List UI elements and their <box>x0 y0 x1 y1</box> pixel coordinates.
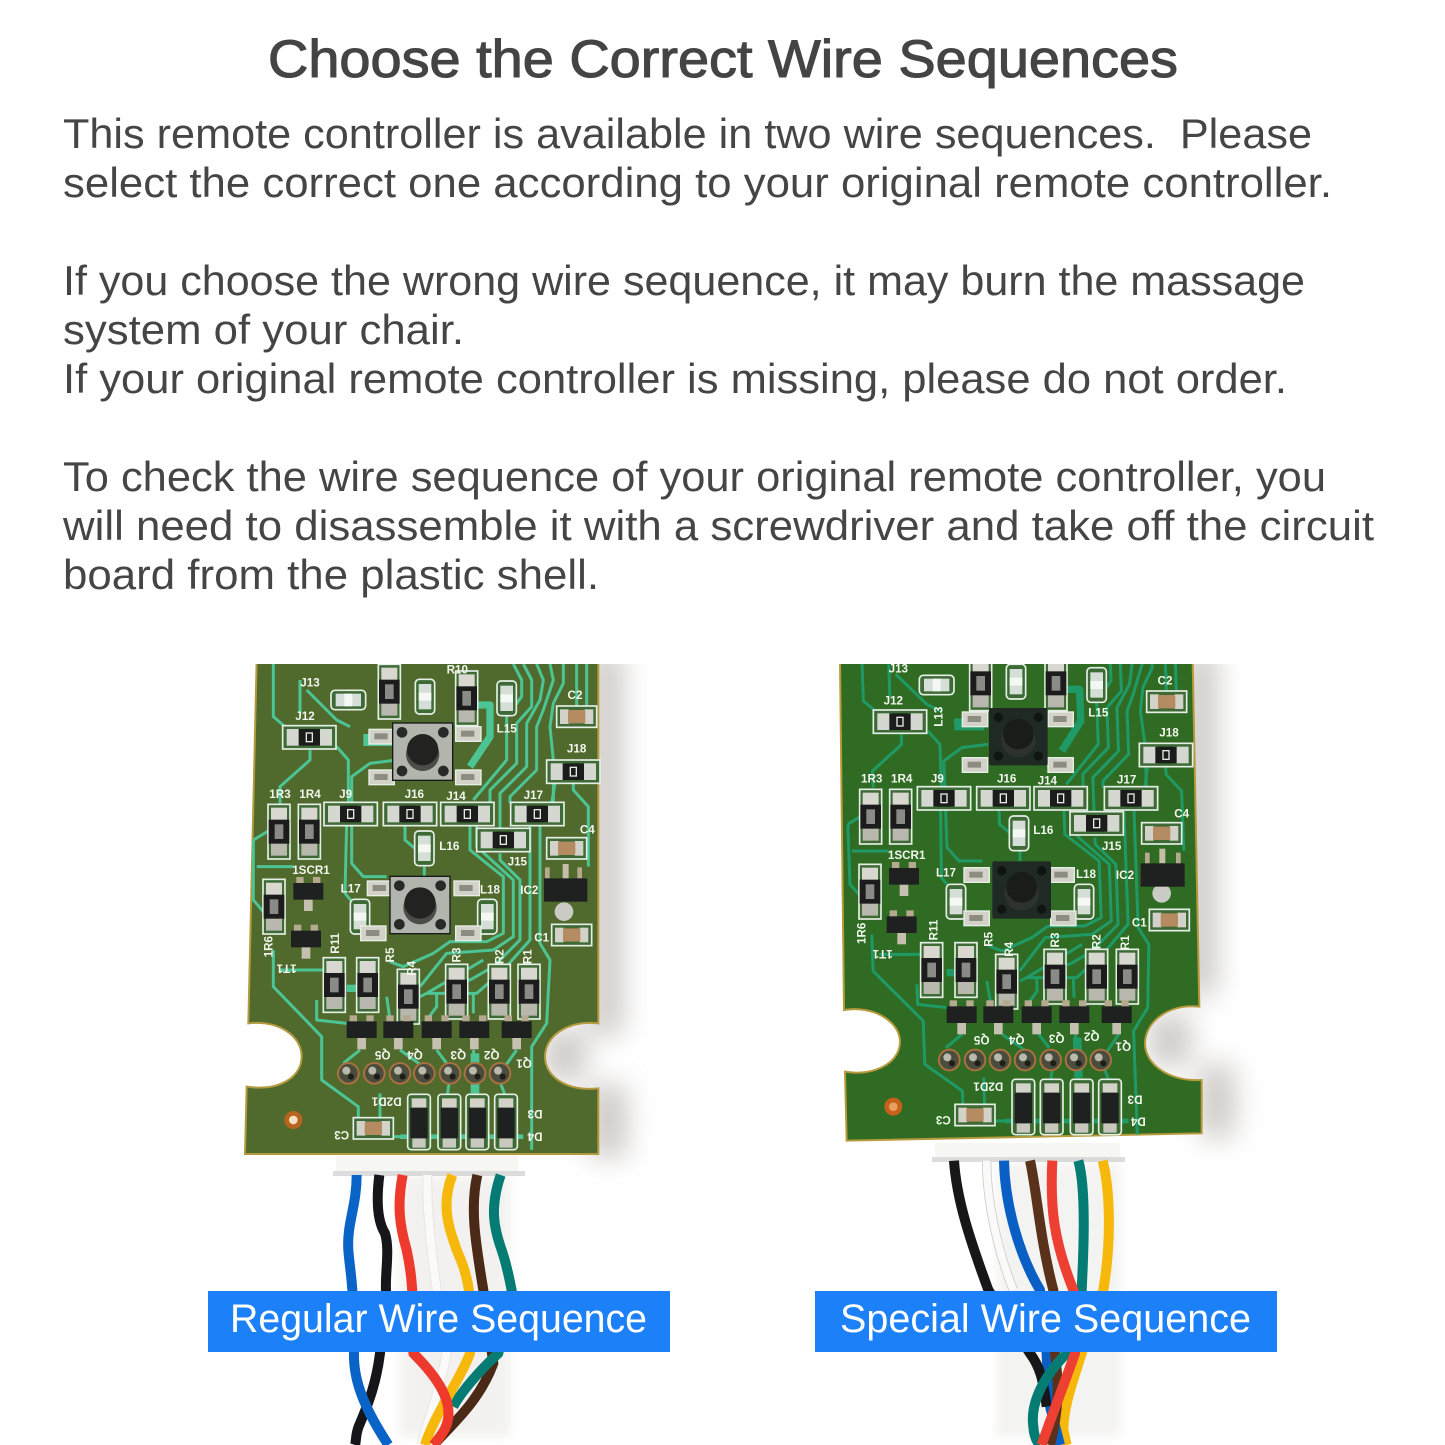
silkscreen labels: C3 <box>334 1128 349 1141</box>
silkscreen labels: R11 <box>329 932 342 954</box>
silkscreen labels: D4 <box>527 1130 542 1143</box>
components: transistors and IC <box>291 864 587 1049</box>
silkscreen labels: Q2 <box>483 1048 499 1061</box>
photo: regular wire sequence circuit board <box>245 650 626 1157</box>
silkscreen labels: L18 <box>1076 868 1097 881</box>
photo: special wire sequence circuit board <box>840 648 1234 1141</box>
components: capacitors <box>955 691 1189 1126</box>
silkscreen labels: Q4 <box>1008 1033 1024 1046</box>
silkscreen labels: R3 <box>1049 932 1062 947</box>
silkscreen labels: R4 <box>406 960 419 976</box>
silkscreen labels: D2D1 <box>973 1080 1003 1093</box>
silkscreen labels: R11 <box>927 919 940 940</box>
silkscreen labels: J9 <box>339 788 353 801</box>
silkscreen labels: 1SCR1 <box>888 849 926 862</box>
components: diodes <box>408 1094 517 1150</box>
silkscreen labels <box>262 663 595 1143</box>
silkscreen labels: C1 <box>1132 917 1147 930</box>
silkscreen labels: J16 <box>405 788 425 801</box>
silkscreen labels: C3 <box>935 1113 951 1126</box>
silkscreen labels: Q1 <box>516 1056 532 1069</box>
silkscreen labels: J18 <box>567 742 587 755</box>
silkscreen labels: L16 <box>1033 824 1054 837</box>
silkscreen labels: R2 <box>1091 934 1104 949</box>
text block: how to check: will need to disassemble it with a screwdriver and take off the circuit <box>62 502 1374 549</box>
text block: how to check <box>62 453 1374 598</box>
board: PCB substrate <box>840 660 1202 1141</box>
text block: availability notice <box>63 110 1332 206</box>
text block: availability notice: This remote controller is available in two wire sequences. Please <box>63 110 1312 157</box>
board traces <box>841 648 1194 1134</box>
silkscreen labels: 1R6 <box>262 935 275 957</box>
silkscreen labels: Q5 <box>973 1033 989 1046</box>
components: push buttons <box>390 723 453 934</box>
silkscreen labels: Q5 <box>374 1048 390 1061</box>
silkscreen labels: J15 <box>1102 840 1122 853</box>
board shadow <box>1150 650 1234 1137</box>
silkscreen labels: J16 <box>997 772 1017 785</box>
mounting hole <box>887 1100 900 1113</box>
board: PCB substrate <box>245 660 598 1154</box>
silkscreen labels: J12 <box>884 695 904 708</box>
board shadow <box>545 650 626 1157</box>
silkscreen labels: L17 <box>936 867 956 880</box>
silkscreen labels: 1T1 <box>872 947 893 960</box>
text block: availability notice: select the correct one according to your original remote controller. <box>63 159 1332 206</box>
silkscreen labels: C2 <box>1158 675 1173 688</box>
silkscreen labels: R2 <box>493 949 506 964</box>
silkscreen labels: 1R6 <box>856 922 869 944</box>
text block: warning <box>63 257 1305 402</box>
text block: warning: If your original remote controller is missing, please do not order. <box>63 355 1287 402</box>
silkscreen labels: R1 <box>521 949 534 964</box>
wires: special sequence <box>954 1161 1120 1445</box>
silkscreen labels: Q4 <box>407 1048 423 1061</box>
silkscreen labels: C1 <box>534 931 550 944</box>
silkscreen labels: D3 <box>1127 1092 1142 1105</box>
mounting hole <box>287 1113 300 1127</box>
solder joints <box>939 1050 1111 1070</box>
silkscreen labels: C4 <box>580 823 595 836</box>
silkscreen labels: J9 <box>931 772 944 785</box>
connector: regular <box>333 1155 525 1176</box>
components: jumpers and resistors <box>263 664 600 1024</box>
silkscreen labels: Q3 <box>1048 1031 1064 1044</box>
components: LEDs and pads <box>331 679 516 941</box>
label: special wire sequence <box>815 1291 1277 1352</box>
silkscreen labels: J14 <box>1038 775 1058 788</box>
silkscreen labels: IC2 <box>520 884 539 897</box>
silkscreen labels: L17 <box>341 882 361 895</box>
components: diodes <box>1012 1079 1121 1135</box>
silkscreen labels: Q2 <box>1083 1030 1099 1043</box>
silkscreen labels: J18 <box>1159 727 1179 740</box>
silkscreen labels: R10 <box>447 663 468 676</box>
silkscreen labels: J14 <box>446 790 466 803</box>
wires: regular sequence <box>348 1175 512 1445</box>
silkscreen labels: J13 <box>889 662 909 675</box>
connector: special <box>932 1143 1125 1162</box>
board traces <box>253 664 588 1150</box>
silkscreen labels: R5 <box>982 931 995 947</box>
silkscreen labels: R4 <box>1003 941 1016 957</box>
silkscreen labels: Q1 <box>1115 1040 1131 1053</box>
silkscreen labels: L13 <box>932 706 945 727</box>
label: special wire sequence: Special Wire Sequence <box>840 1297 1251 1341</box>
label: regular wire sequence <box>208 1291 670 1352</box>
silkscreen labels: D4 <box>1130 1115 1146 1128</box>
silkscreen labels: J13 <box>300 677 320 690</box>
label: regular wire sequence: Regular Wire Sequence <box>230 1297 647 1341</box>
silkscreen labels: C4 <box>1174 807 1190 820</box>
silkscreen labels: J12 <box>295 710 315 723</box>
silkscreen labels: IC2 <box>1116 869 1135 882</box>
components: LEDs and pads <box>919 664 1106 926</box>
text block: how to check: To check the wire sequence of your original remote controller, you <box>63 453 1326 500</box>
silkscreen labels: J17 <box>1117 773 1136 786</box>
silkscreen labels: J17 <box>524 789 543 802</box>
text block: how to check: board from the plastic shell. <box>63 551 599 598</box>
silkscreen labels: 1R3 <box>269 788 291 801</box>
silkscreen labels: L15 <box>497 722 517 735</box>
silkscreen labels: 1T1 <box>276 961 297 974</box>
silkscreen labels: D2D1 <box>371 1095 402 1108</box>
solder joints <box>338 1063 510 1084</box>
silkscreen labels: Q3 <box>450 1048 466 1061</box>
silkscreen labels: 1R3 <box>861 772 883 785</box>
components: jumpers and resistors <box>859 656 1193 1009</box>
silkscreen labels: C2 <box>568 689 583 702</box>
text block: warning: system of your chair. <box>63 306 464 353</box>
silkscreen labels: J15 <box>508 856 528 869</box>
silkscreen labels: D3 <box>527 1107 542 1120</box>
silkscreen labels: L16 <box>439 840 460 853</box>
silkscreen labels: R1 <box>1119 935 1132 950</box>
silkscreen labels: L15 <box>1088 707 1109 720</box>
silkscreen labels: 1R4 <box>891 772 913 785</box>
silkscreen labels <box>856 662 1190 1128</box>
silkscreen labels: 1R4 <box>299 788 321 801</box>
silkscreen labels: L18 <box>480 883 501 896</box>
components: push buttons <box>989 708 1051 919</box>
silkscreen labels: 1SCR1 <box>292 864 330 877</box>
silkscreen labels: R5 <box>384 947 397 962</box>
components: capacitors <box>353 706 597 1139</box>
text block: warning: If you choose the wrong wire sequence, it may burn the massage <box>63 257 1305 304</box>
silkscreen labels: R3 <box>451 947 464 962</box>
title: Choose the Correct Wire Sequences <box>268 30 1178 89</box>
components: transistors and IC <box>887 849 1185 1034</box>
